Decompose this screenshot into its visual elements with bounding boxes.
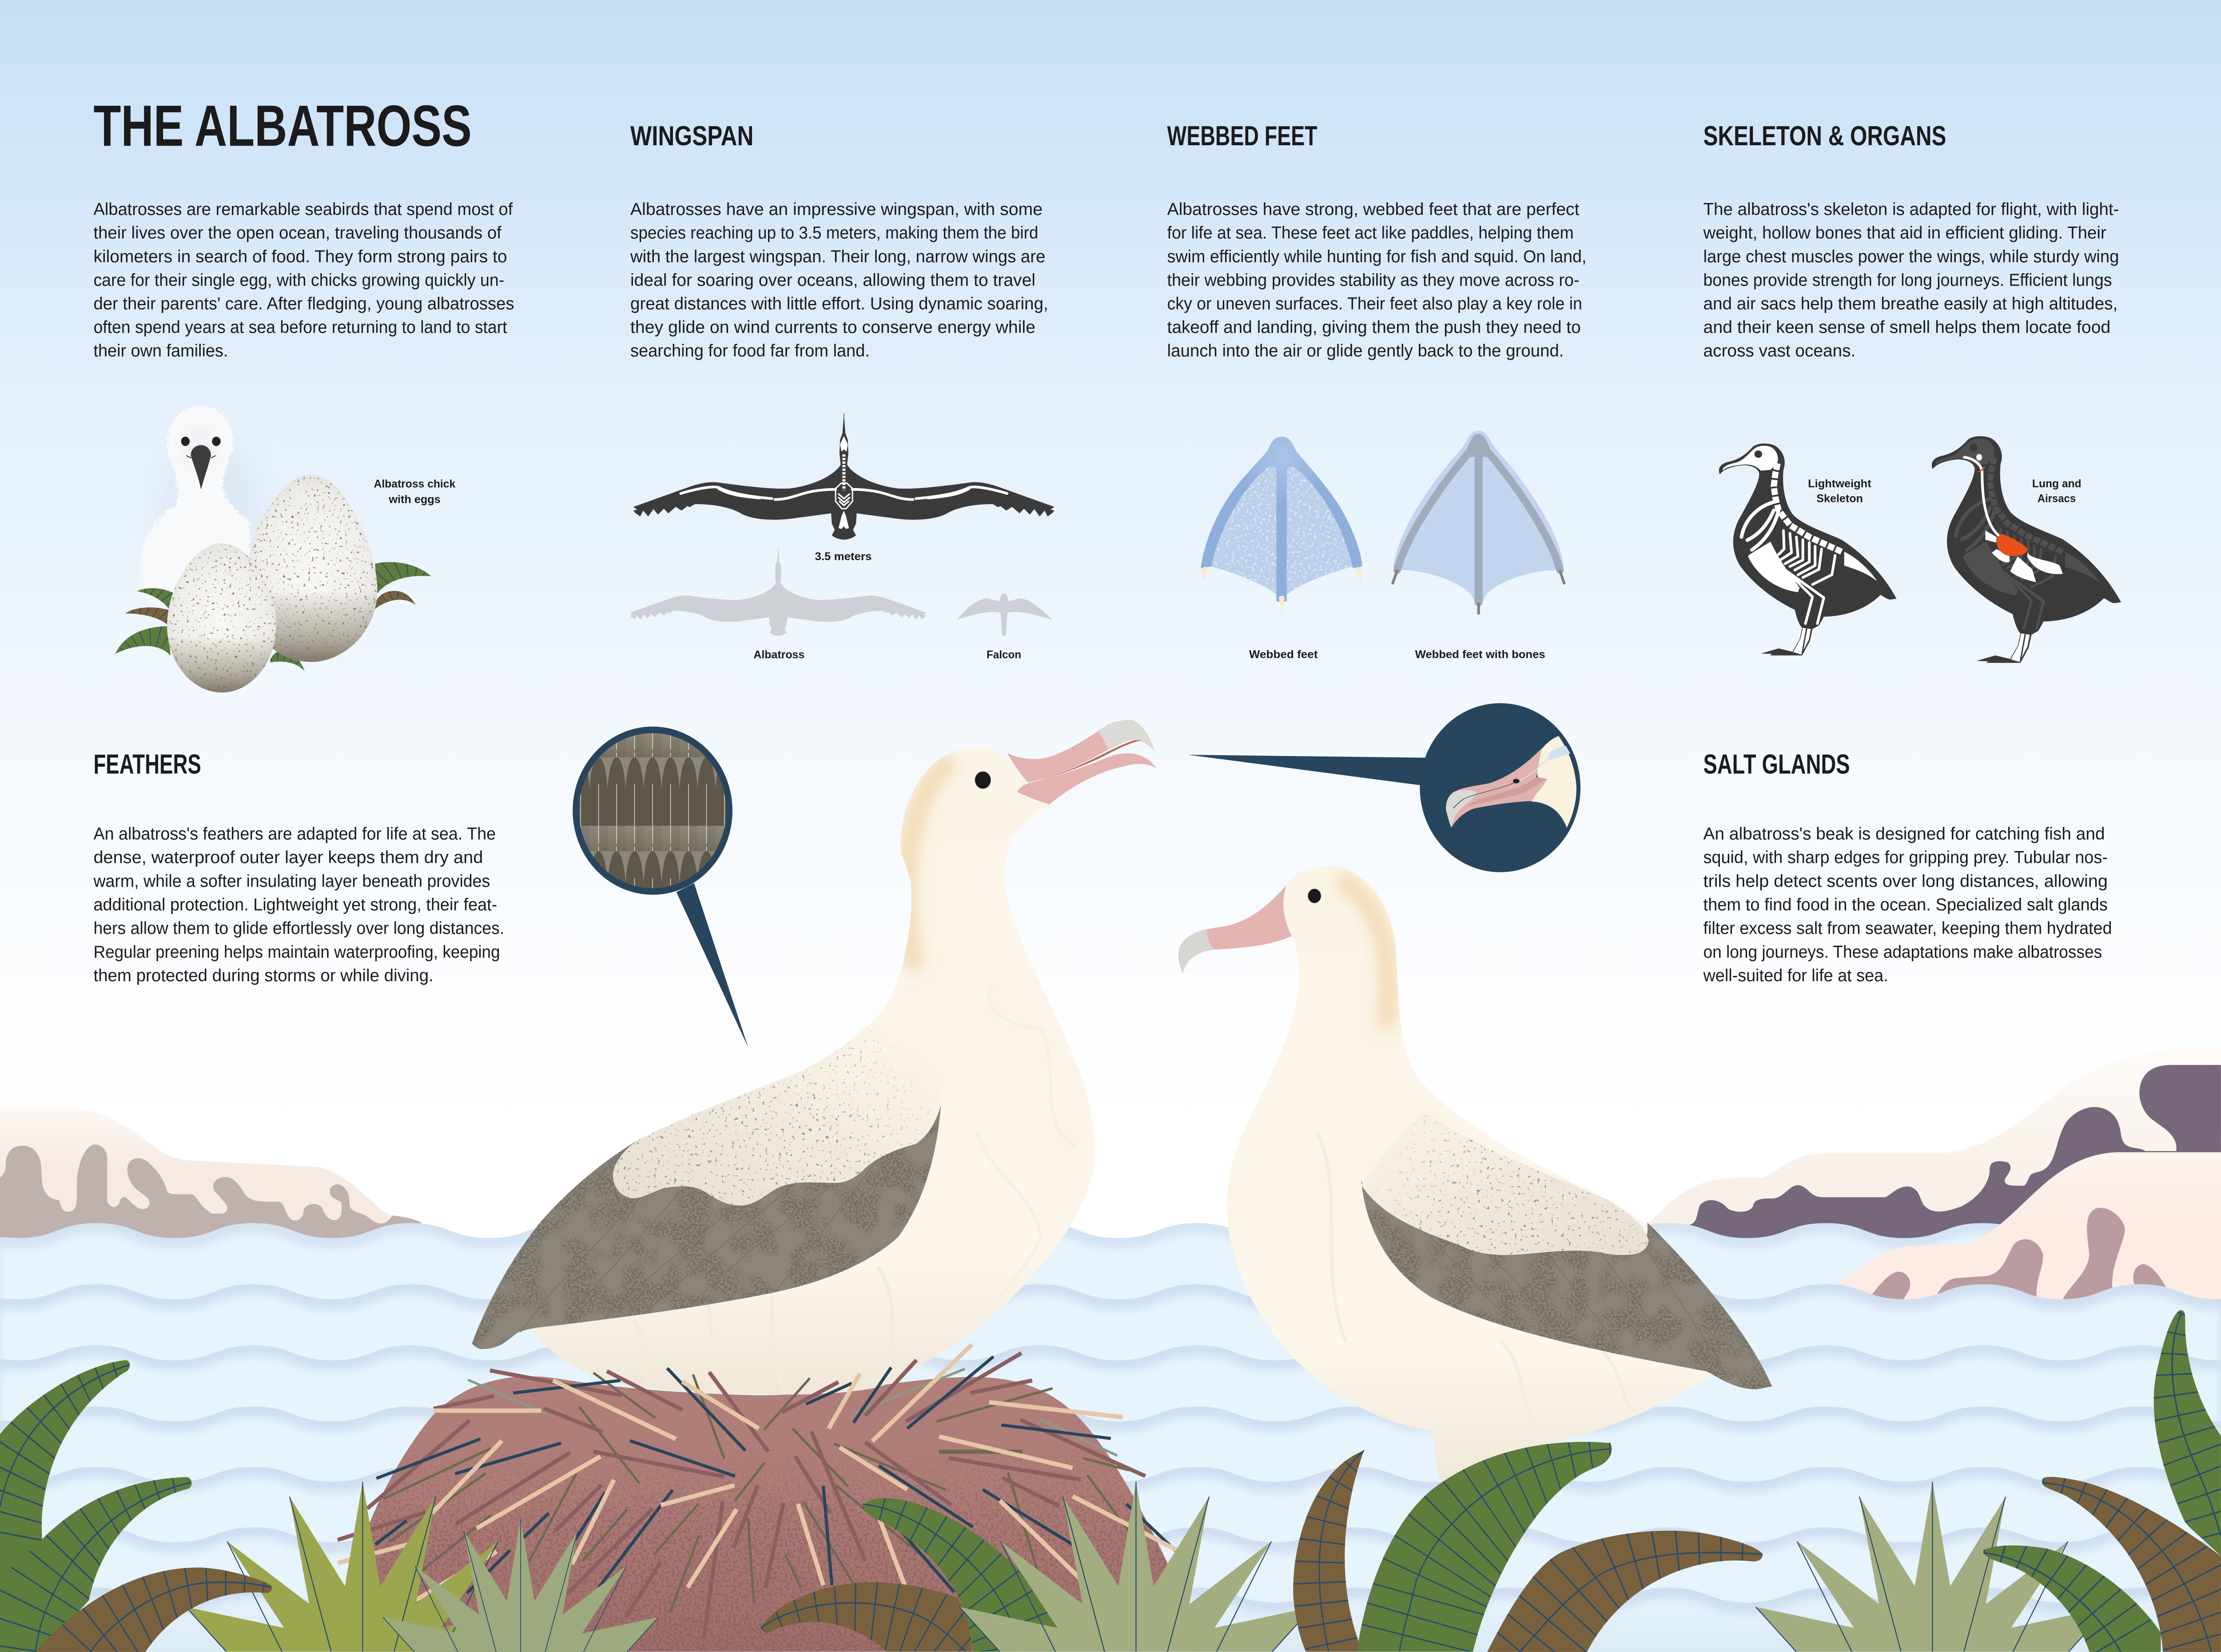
text block: introduction: often spend years at sea before returning to land to start: [93, 318, 507, 337]
left bird eye: [975, 771, 991, 789]
centre foreground leaves and plant: [760, 1442, 1612, 1652]
text block: skeleton and organs: [1703, 199, 2119, 360]
text block: wingspan: species reaching up to 3.5 meters, making them the bird: [630, 223, 1038, 242]
text block: skeleton and organs: bones provide strength for long journeys. Efficient lungs: [1704, 270, 2112, 290]
illustration: webbed foot: [1201, 437, 1362, 614]
label: webbed feet with bones: Webbed feet with bones: [1415, 649, 1545, 661]
heading: skeleton and organs: SKELETON & ORGANS: [1704, 120, 1946, 151]
text block: introduction: der their parents' care. After fledging, young albatrosses: [93, 294, 514, 313]
label: falcon: Falcon: [987, 649, 1021, 661]
label: 3.5 meters: 3.5 meters: [815, 551, 872, 563]
text block: feathers: Regular preening helps maintain waterproofing, keeping: [93, 942, 500, 961]
leaf: top green: [0, 1360, 130, 1589]
text block: feathers: [93, 824, 504, 985]
right bird eye: [1308, 888, 1321, 904]
text block: skeleton and organs: The albatross's skeleton is adapted for flight, with light-: [1704, 199, 2119, 219]
small leaves: [115, 562, 431, 671]
plant: sage spikes right: [1756, 1482, 2109, 1652]
illustration: webbed foot with bones: [1393, 430, 1564, 613]
callout: feather close-up: [576, 730, 748, 1047]
text block: webbed feet: cky or uneven surfaces. Their feet also play a key role in: [1167, 294, 1582, 313]
text block: webbed feet: their webbing provides stability as they move across ro-: [1167, 270, 1579, 290]
heading: webbed feet: WEBBED FEET: [1167, 120, 1317, 151]
label: chick with eggs: [374, 478, 456, 506]
text block: salt glands: on long journeys. These adaptations make albatrosses: [1704, 942, 2102, 961]
text block: wingspan: [630, 199, 1048, 360]
sky background: [0, 0, 2221, 1133]
albatross: right bird: [1178, 866, 1776, 1483]
text block: feathers: dense, waterproof outer layer keeps them dry and: [93, 848, 483, 867]
label: lightweight skeleton: Skeleton: [1816, 493, 1863, 505]
label: albatross: Albatross: [753, 649, 804, 661]
right distant rock: [1650, 1047, 2221, 1303]
plant: olive spikes: [186, 1482, 539, 1652]
illustration: chick with eggs: [115, 406, 431, 695]
illustration: albatross and falcon silhouettes: [630, 547, 1052, 636]
text block: wingspan: ideal for soaring over oceans, allowing them to travel: [630, 270, 1035, 290]
leaf: brown: [36, 1568, 272, 1652]
text block: skeleton and organs: large chest muscles power the wings, while sturdy wing: [1704, 247, 2119, 266]
label: webbed feet: Webbed feet: [1249, 649, 1318, 661]
left distant rock: [0, 1108, 422, 1242]
illustration: wingspan skeleton silhouette: [633, 413, 1055, 540]
albatross: left bird raising beak: [467, 720, 1156, 1395]
left bird beak: [1007, 720, 1156, 804]
heading: wingspan: WINGSPAN: [630, 120, 753, 151]
leaf: big green: [1357, 1442, 1612, 1652]
text block: webbed feet: for life at sea. These feet act like paddles, helping them: [1167, 223, 1574, 242]
left bird coverts: [609, 1026, 946, 1207]
leaf: right brown: [2042, 1477, 2221, 1652]
left foreground leaves and plants: [0, 1360, 658, 1652]
text block: introduction: their own families.: [93, 341, 228, 360]
heading: salt glands: SALT GLANDS: [1704, 748, 1850, 780]
leaf: lower green: [1983, 1545, 2161, 1652]
heading: feathers: FEATHERS: [93, 748, 201, 780]
nest: [333, 1376, 1197, 1652]
left bird dark wing: [467, 1103, 949, 1360]
illustration: lightweight skeleton: [1719, 443, 1897, 655]
right bird coverts: [1357, 1106, 1654, 1262]
text block: salt glands: them to find food in the ocean. Specialized salt glands: [1704, 895, 2108, 914]
text block: feathers: warm, while a softer insulating layer beneath provides: [93, 872, 490, 891]
text block: feathers: additional protection. Lightweight yet strong, their feat-: [93, 895, 497, 914]
text block: salt glands: well-suited for life at sea.: [1703, 966, 1888, 985]
text block: wingspan: with the largest wingspan. Their long, narrow wings are: [630, 247, 1045, 266]
text block: introduction: Albatrosses are remarkable seabirds that spend most of: [93, 199, 513, 219]
text block: webbed feet: swim efficiently while hunting for fish and squid. On land,: [1167, 247, 1586, 266]
text block: webbed feet: [1167, 199, 1586, 360]
leaf: tall brown: [1293, 1450, 1364, 1652]
label: lung and airsacs: Airsacs: [2038, 493, 2076, 505]
sea: wave rows: [0, 1284, 2221, 1652]
illustration: lung and airsacs: [1932, 436, 2121, 663]
leaf: middle green: [0, 1477, 192, 1652]
label: chick with eggs: Albatross chick: [374, 478, 456, 490]
text block: wingspan: Albatrosses have an impressive wingspan, with some: [630, 199, 1043, 219]
text block: salt glands: An albatross's beak is designed for catching fish and: [1704, 824, 2105, 843]
text block: salt glands: squid, with sharp edges for gripping prey. Tubular nos-: [1704, 848, 2108, 867]
text block: wingspan: great distances with little effort. Using dynamic soaring,: [630, 294, 1048, 313]
leaf: nest green: [863, 1498, 1071, 1652]
text block: skeleton and organs: weight, hollow bones that aid in efficient gliding. Their: [1703, 223, 2106, 242]
leaf: nest brown: [760, 1582, 972, 1652]
label: lightweight skeleton: [1808, 478, 1871, 505]
text block: wingspan: they glide on wind currents to conserve energy while: [630, 318, 1035, 337]
leaf: upright green: [2154, 1310, 2221, 1556]
label: chick with eggs: with eggs: [388, 494, 441, 506]
text block: feathers: hers allow them to glide effortlessly over long distances.: [93, 919, 504, 938]
text block: introduction: [93, 199, 514, 360]
text block: salt glands: trils help detect scents over long distances, allowing: [1704, 872, 2108, 891]
text block: salt glands: filter excess salt from seawater, keeping them hydrated: [1704, 919, 2112, 938]
text block: wingspan: searching for food far from land.: [630, 341, 870, 360]
text block: introduction: their lives over the open ocean, traveling thousands of: [93, 223, 502, 242]
right bird dark wing: [1357, 1174, 1776, 1395]
label: lightweight skeleton: Lightweight: [1808, 478, 1871, 490]
right foreground rock: [1835, 1152, 2221, 1307]
plant: sage spikes: [383, 1520, 658, 1652]
right foreground leaves and plant: [1487, 1310, 2221, 1652]
title: THE ALBATROSS: [93, 93, 472, 159]
text block: feathers: them protected during storms or while diving.: [93, 966, 434, 985]
text block: feathers: An albatross's feathers are adapted for life at sea. The: [93, 824, 496, 843]
text block: salt glands: [1703, 824, 2112, 985]
leaf: brown centre right: [1487, 1531, 1763, 1652]
label: lung and airsacs: [2032, 478, 2082, 505]
text block: introduction: care for their single egg, with chicks growing quickly un-: [93, 270, 504, 290]
text block: skeleton and organs: and their keen sense of smell helps them locate food: [1704, 318, 2110, 337]
text block: webbed feet: launch into the air or glide gently back to the ground.: [1167, 341, 1564, 360]
text block: skeleton and organs: across vast oceans.: [1704, 341, 1855, 360]
text block: skeleton and organs: and air sacs help them breathe easily at high altitudes,: [1704, 294, 2118, 313]
text block: webbed feet: takeoff and landing, giving them the push they need to: [1167, 318, 1581, 337]
plant: sage spikes centre: [959, 1482, 1313, 1652]
sea: back wave: [0, 1223, 2221, 1652]
text block: introduction: kilometers in search of food. They form strong pairs to: [93, 247, 507, 266]
label: lung and airsacs: Lung and: [2032, 478, 2082, 490]
right bird beak: [1178, 885, 1292, 973]
callout: salt gland close-up: [1188, 703, 1580, 872]
nest sticks: [338, 1345, 1178, 1639]
text block: webbed feet: Albatrosses have strong, webbed feet that are perfect: [1167, 199, 1580, 219]
